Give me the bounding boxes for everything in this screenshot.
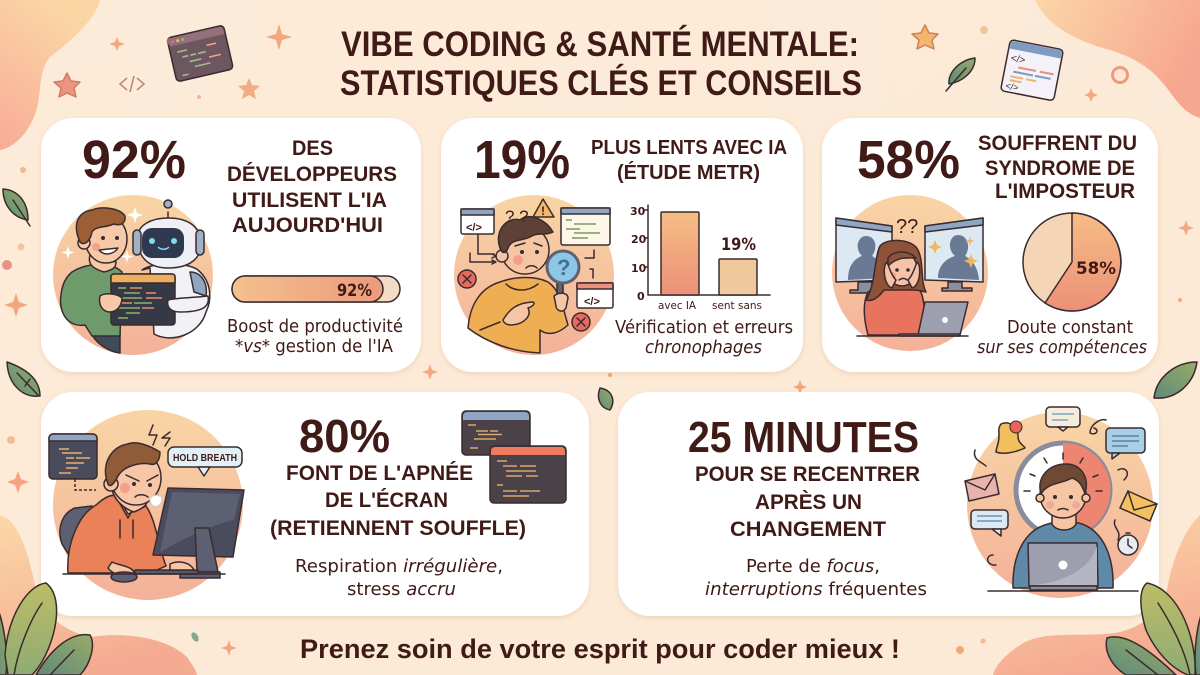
caption: Respiration irrégulière, xyxy=(295,556,503,577)
caption: Doute constant xyxy=(1007,317,1133,338)
heading: plus lents: (ÉTUDE METR) xyxy=(617,161,760,184)
progress bar 92% xyxy=(232,276,400,302)
heading: syndrome de l'imposteur: L'IMPOSTEUR xyxy=(995,180,1135,203)
caption: sur ses compétences xyxy=(977,337,1147,358)
panel: 80% screen apnea xyxy=(41,392,589,616)
heading: des développeurs: AUJOURD'HUI xyxy=(232,214,383,237)
caption: Boost de productivité xyxy=(227,316,403,337)
stat: 58%: 58% xyxy=(857,130,960,190)
bar chart: 10 xyxy=(631,262,647,275)
panel: 25 minutes to refocus xyxy=(618,392,1159,616)
illustration: confused developer with magnifier: </> xyxy=(466,222,482,234)
caption xyxy=(615,317,793,358)
heading: pour se recentrer: CHANGEMENT xyxy=(730,518,886,541)
bar chart: 30 xyxy=(630,205,646,218)
heading: apnée de l'écran: DE L'ÉCRAN xyxy=(325,489,448,512)
axis labels: avec IA xyxy=(658,300,697,312)
heading: des développeurs: DÉVELOPPEURS xyxy=(227,163,397,186)
caption xyxy=(227,316,403,357)
heading: des développeurs xyxy=(227,137,397,237)
plant: bottom left leaves xyxy=(0,583,92,675)
heading: apnée de l'écran xyxy=(270,462,526,540)
illustration: confused developer with magnifier: ? ? xyxy=(505,207,529,226)
illustration: confused developer with magnifier: </> xyxy=(584,296,600,308)
caption: interruptions fréquentes xyxy=(705,579,927,600)
speech bubble text: HOLD BREATH xyxy=(173,452,237,464)
illustration: confused developer with magnifier: ! xyxy=(541,204,545,218)
pie chart 58% xyxy=(1023,213,1121,311)
title: VIBE CODING & SANTÉ MENTALE: xyxy=(341,24,859,64)
bar: avec IA xyxy=(661,212,699,295)
caption: chronophages xyxy=(645,337,762,358)
panel: 92% developers use AI xyxy=(41,118,421,372)
heading: plus lents: PLUS LENTS AVEC IA xyxy=(591,137,787,159)
bar chart xyxy=(630,205,770,312)
caption: *vs* gestion de l'IA xyxy=(235,336,394,357)
plant: bottom right leaves xyxy=(1106,583,1200,675)
footer message: Prenez soin de votre esprit pour coder mieux ! xyxy=(300,634,900,664)
illustration: confused developer with magnifier xyxy=(454,195,614,355)
stat: 92%: 92% xyxy=(82,130,186,190)
illustration: developer and robot xyxy=(53,195,213,355)
icon: code window top right xyxy=(1001,40,1063,101)
bar: sent sans xyxy=(719,259,757,295)
illustration: confused developer with magnifier: ? xyxy=(557,255,570,280)
heading: pour se recentrer: POUR SE RECENTRER xyxy=(695,463,920,486)
caption xyxy=(705,556,927,600)
heading: pour se recentrer: APRÈS UN xyxy=(755,491,862,514)
caption: stress accru xyxy=(347,579,456,600)
heading: des développeurs: UTILISENT L'IA xyxy=(232,189,387,212)
icon: code window top right: </> xyxy=(1005,81,1019,93)
title xyxy=(340,24,862,103)
icon: code window top left xyxy=(166,25,233,82)
heading: plus lents xyxy=(591,137,787,184)
pie chart 58%: 58% xyxy=(1076,259,1116,279)
stat: 80%: 80% xyxy=(299,410,390,462)
illustration: worried woman between monitors: ?? xyxy=(896,216,918,238)
icon: code windows xyxy=(462,411,566,503)
heading: syndrome de l'imposteur: SOUFFRENT DU xyxy=(978,132,1137,155)
illustration: stressed developer at monitor xyxy=(49,410,244,600)
stat: 19%: 19% xyxy=(474,130,570,190)
progress bar 92%: 92% xyxy=(337,281,372,301)
heading: pour se recentrer xyxy=(695,463,920,541)
panel: 19% slower with AI xyxy=(441,118,803,372)
heading: des développeurs: DES xyxy=(292,137,333,160)
caption: Vérification et erreurs xyxy=(615,317,793,338)
caption xyxy=(295,556,503,600)
heading: syndrome de l'imposteur xyxy=(978,132,1137,203)
axis labels xyxy=(658,300,762,312)
heading: apnée de l'écran: (RETIENNENT SOUFFLE) xyxy=(270,517,526,540)
icon: code window top right: </> xyxy=(1010,53,1026,67)
illustration: worried woman between monitors xyxy=(832,195,988,351)
bar value: 19% xyxy=(721,235,756,255)
panel: 58% imposter syndrome xyxy=(822,118,1158,372)
heading: apnée de l'écran: FONT DE L'APNÉE xyxy=(286,462,473,485)
title: STATISTIQUES CLÉS ET CONSEILS xyxy=(340,63,862,103)
bar chart: 20 xyxy=(631,233,647,246)
caption xyxy=(977,317,1147,358)
heading: syndrome de l'imposteur: SYNDROME DE xyxy=(985,157,1135,180)
axis labels: sent sans xyxy=(712,300,762,312)
caption: Perte de focus, xyxy=(746,556,880,577)
stat: 25 minutes: 25 MINUTES xyxy=(688,413,919,462)
illustration: distracted developer with clock and notifications xyxy=(965,407,1157,598)
bar chart: 0 xyxy=(637,290,645,303)
